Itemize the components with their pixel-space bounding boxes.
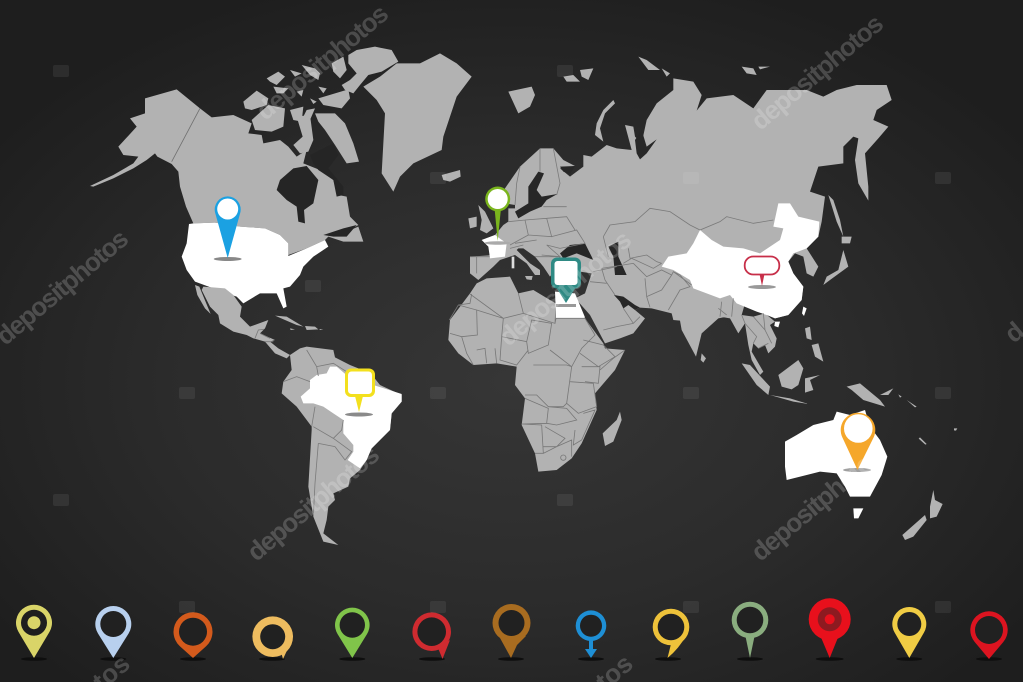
Corsica and Sardinia [512, 257, 514, 268]
pin: blue on USA [214, 196, 242, 261]
Africa land [448, 277, 625, 472]
Tasmania [853, 508, 863, 518]
Java [770, 395, 808, 404]
Eurasia [468, 57, 892, 318]
watermark camera icons [53, 65, 951, 613]
Europe and Central Asia borders [470, 148, 773, 273]
Sakhalin [828, 195, 843, 237]
Queen Elizabeth Islands [267, 65, 327, 104]
Mexico and Central America [195, 285, 323, 358]
Canada and Alaska [90, 89, 363, 255]
pin 10 sage [732, 602, 768, 661]
Hainan and Taiwan [774, 307, 807, 327]
pin 13 red [970, 611, 1008, 661]
pin 2 light blue [95, 606, 131, 661]
Ellesmere Island [342, 47, 398, 93]
South America and Africa [282, 277, 625, 545]
Baffin Island [315, 113, 359, 163]
Iceland [442, 170, 461, 182]
Sumatra [742, 363, 770, 395]
China highlighted [662, 203, 819, 318]
pin 1 khaki [16, 605, 52, 661]
Prince of Wales and Somerset [290, 107, 315, 130]
New Zealand [902, 490, 943, 540]
Arabia, Iran and India land [575, 250, 738, 357]
Japan [823, 237, 852, 285]
Eurasia land [470, 78, 892, 318]
Southeast Asia islands and Oceania [701, 307, 957, 540]
USA highlighted [182, 223, 328, 308]
South America borders [283, 350, 352, 517]
Brazil highlighted [301, 367, 402, 468]
pin: green on France [485, 186, 511, 245]
Persian Gulf and Asia borders [590, 248, 733, 330]
Asia border lines [590, 248, 733, 330]
Egypt Sinai edge [555, 292, 585, 317]
Borneo [778, 360, 803, 389]
Devon Island [318, 89, 350, 108]
Victoria Island [252, 105, 285, 132]
Mexico land [202, 287, 290, 358]
Southeast Asia borders [742, 313, 772, 348]
Svalbard and Arctic islands [508, 57, 770, 142]
Greenland [363, 53, 472, 192]
Sri Lanka [701, 353, 706, 363]
pin 9 yellow [653, 609, 689, 661]
Southeast Asia mainland [720, 295, 777, 375]
Axel Heiberg Island [332, 57, 347, 78]
Central America borders [255, 329, 273, 342]
pin: orange on Australia [841, 413, 875, 472]
Africa borders [449, 293, 625, 457]
Baja California [195, 285, 211, 314]
pin 3 orange [173, 612, 212, 661]
watermark text: depositphotos [745, 8, 889, 136]
Hudson Bay [277, 143, 357, 237]
Arctic archipelago [243, 47, 398, 163]
pin 12 gold [892, 607, 926, 661]
North America [90, 53, 472, 308]
pin 11 bright red target [809, 598, 851, 661]
pin 6 red [412, 612, 451, 661]
inland seas [515, 130, 657, 275]
watermark text: depositphotos [241, 439, 385, 567]
Sulawesi [805, 375, 820, 393]
pin: red on China [745, 256, 779, 289]
Alaska border [172, 108, 200, 162]
pin: yellow on Brazil [345, 368, 375, 416]
Sicily [525, 276, 533, 280]
Australia highlighted [785, 410, 887, 497]
Madagascar [603, 412, 622, 446]
pin 8 blue arrow [576, 610, 606, 661]
Pacific islands [898, 394, 957, 445]
New Guinea [837, 380, 893, 407]
watermark text: depositphotos [493, 224, 637, 352]
Philippines [805, 327, 823, 362]
Boothia and Melville peninsulas [293, 115, 313, 153]
pin 7 brown [492, 604, 530, 661]
Great Britain and Ireland [468, 205, 493, 233]
pin 5 green [335, 608, 370, 661]
pin: teal on Egypt [551, 258, 581, 307]
Egypt highlighted [556, 303, 585, 318]
France highlighted [482, 235, 507, 258]
watermark text: depositphotos [250, 0, 394, 126]
watermark text: depositphotos [745, 439, 889, 567]
South America land [282, 347, 402, 545]
world map [90, 47, 957, 545]
Cuba and Caribbean islands [275, 316, 323, 330]
Lesotho [561, 455, 566, 460]
Persian Gulf [614, 295, 640, 310]
pin 4 sand [252, 616, 293, 661]
pin row [16, 598, 1008, 661]
Banks Island [243, 91, 268, 110]
